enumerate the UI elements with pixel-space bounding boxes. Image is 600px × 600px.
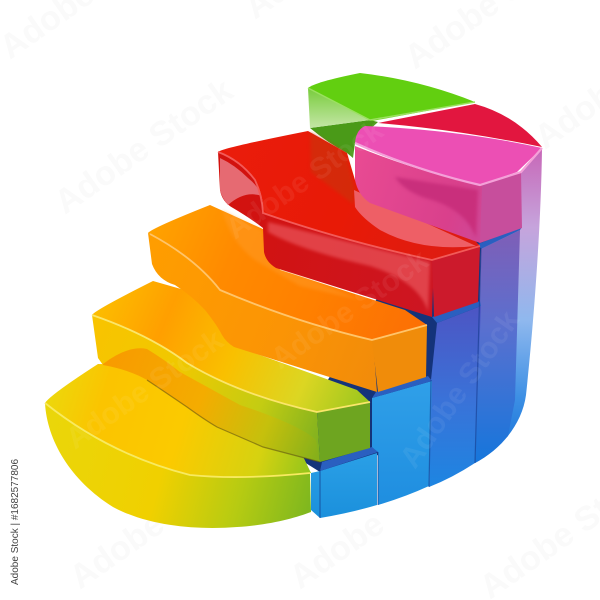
orange end cap: [372, 325, 427, 392]
red left reflection: [220, 158, 262, 205]
wall top faces: [320, 227, 522, 471]
green top: [308, 73, 475, 121]
red front reflection: [268, 222, 430, 312]
watermarks over chart: Adobe Stock: [265, 243, 434, 376]
wall segment: sky blue short: [311, 453, 377, 518]
green light front: [308, 88, 370, 128]
pink front dark reflection: [395, 177, 478, 238]
orange top: [148, 205, 427, 340]
yellow front: [45, 403, 311, 528]
yellow-green rim highlight: [92, 315, 370, 412]
contact shadow line: [147, 380, 320, 462]
pink top: [355, 126, 542, 185]
watermarks: Adobe Stock: [63, 446, 255, 597]
cylinder wall: blue and violet segments: [285, 148, 542, 518]
slice: green top step: [308, 73, 475, 158]
red front: [218, 152, 434, 317]
red top pink reflection: [354, 190, 476, 247]
watermarks over chart: Adobe Stock: [220, 113, 389, 246]
slice: yellow bottom step: [45, 364, 311, 528]
orange top reflection: [222, 210, 360, 300]
dark wall backing: [285, 180, 522, 472]
green end cap: [317, 402, 370, 462]
slice: crimson top: [378, 104, 542, 147]
pink front: [355, 146, 482, 243]
pink rim highlight: [355, 143, 542, 185]
slice: orange step: [148, 205, 427, 392]
watermarks: Adobe: [283, 505, 391, 597]
red top: [218, 131, 480, 260]
orange front: [148, 233, 377, 392]
yellow rim highlight: [45, 403, 310, 477]
wall segment: outer strip: [475, 148, 542, 463]
red top dark reflection: [310, 132, 355, 204]
slice: yellow-green step: [92, 281, 370, 462]
slice: pink top step: [355, 126, 542, 243]
watermarks over chart: [60, 113, 526, 474]
slice: red step: [218, 131, 480, 317]
wall segment: indigo: [429, 306, 481, 487]
watermarks: Adobe Stock: [48, 71, 240, 222]
red rim highlight: [218, 152, 480, 260]
green dark front: [310, 120, 378, 158]
wall seams: [320, 248, 481, 518]
green rim highlight: [308, 88, 475, 120]
stock id caption: Adobe Stock | #1682577806: [10, 459, 21, 585]
front reflection: [103, 348, 320, 462]
wall segment: back blue: [475, 230, 520, 463]
orange rim highlight: [150, 234, 427, 340]
yellow top: [45, 364, 311, 477]
yellow-green top: [92, 281, 370, 412]
watermarks over chart: Adobe Stock: [60, 323, 229, 456]
yellow-green front: [92, 315, 320, 462]
red end cap: [432, 246, 480, 317]
wall segment: sky blue tall: [372, 381, 432, 505]
pink end cap: [480, 172, 522, 243]
watermarks over chart: Adobe Stock: [394, 305, 526, 474]
